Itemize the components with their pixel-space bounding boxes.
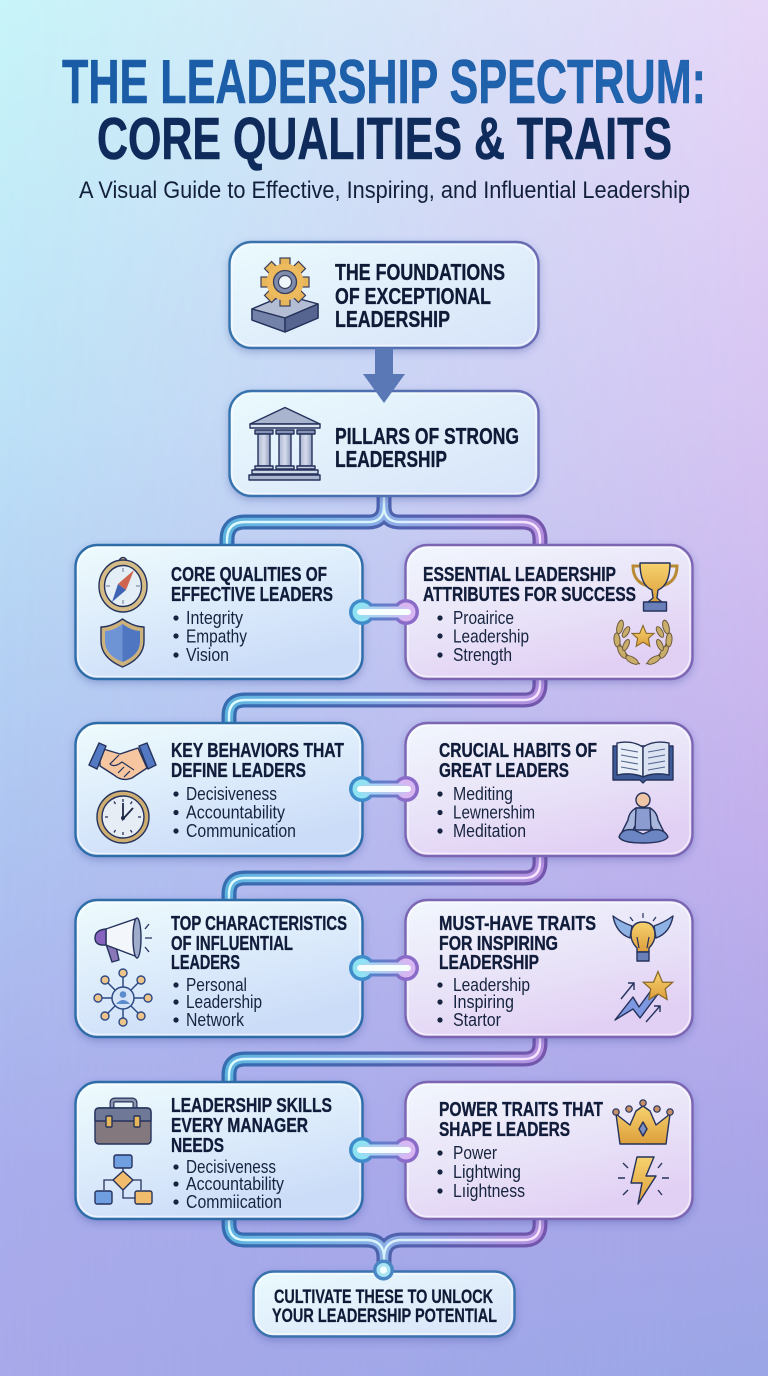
link: row three cards: [349, 955, 419, 981]
connector: pillars fork to first row: [227, 494, 540, 548]
heading: OF EXCEPTIONAL: [335, 283, 491, 309]
icon: lightning bolt: [618, 1157, 669, 1204]
bullet list: [437, 975, 530, 1030]
heading: MUST-HAVE TRAITS: [439, 913, 596, 935]
arrow: foundations to pillars: [363, 348, 405, 403]
heading: NEEDS: [171, 1135, 224, 1157]
bullet list: Lıightness: [453, 1181, 525, 1201]
bullet list: Leadership: [453, 626, 529, 646]
bullet list: Inspiring: [453, 992, 514, 1012]
bullet list: Strength: [453, 645, 512, 665]
heading: [335, 259, 505, 332]
bullet list: Vision: [186, 645, 229, 665]
heading: GREAT LEADERS: [439, 760, 569, 782]
icon: pillars: [249, 408, 320, 480]
heading: [439, 1099, 603, 1141]
bullet list: Commiication: [186, 1192, 282, 1212]
panel: top characteristics: [76, 900, 362, 1037]
bullet list: Empathy: [186, 626, 247, 646]
connector: row two to row three: [229, 853, 540, 903]
connector: row one to row two: [229, 676, 540, 726]
bullet list: Meditation: [453, 821, 526, 841]
bullet list: Proairice: [453, 608, 514, 628]
panel: leadership skills: [76, 1082, 362, 1219]
icon: megaphone: [95, 918, 152, 962]
heading: LEADERSHIP: [335, 446, 447, 472]
icon: gear on stone block: [252, 258, 318, 332]
heading: [171, 740, 344, 782]
heading: CORE QUALITIES OF: [171, 564, 327, 586]
bullet list: [173, 1157, 284, 1212]
heading: [171, 564, 333, 606]
heading: LEADERSHIP SKILLS: [171, 1095, 332, 1117]
closing text: CULTIVATE THESE TO UNLOCK: [274, 1287, 493, 1308]
bullet list: Accountability: [186, 1174, 284, 1194]
connector: row three to row four: [229, 1034, 540, 1085]
panel: essential attributes: [406, 545, 692, 679]
icon: crown: [613, 1100, 673, 1144]
heading: LEADERSHIP: [439, 952, 539, 974]
heading: [171, 1095, 332, 1157]
bullet list: Personal: [186, 975, 247, 995]
icon: compass: [99, 557, 147, 612]
heading: [423, 564, 636, 606]
panel: core qualities: [76, 545, 362, 679]
title: [62, 48, 706, 172]
bullet list: Lightwing: [453, 1162, 521, 1182]
closing text: YOUR LEADERSHIP POTENTIAL: [272, 1306, 497, 1327]
panel: power traits: [406, 1082, 692, 1219]
heading: THE FOUNDATIONS: [335, 259, 505, 285]
icon: people network: [94, 969, 152, 1026]
bullet list: Leadership: [186, 992, 262, 1012]
heading: LEADERS: [171, 952, 240, 974]
heading: EFFECTIVE LEADERS: [171, 584, 333, 606]
heading: LEADERSHIP: [335, 306, 450, 332]
link: row four cards: [349, 1137, 419, 1163]
heading: DEFINE LEADERS: [171, 760, 306, 782]
heading: FOR INSPIRING: [439, 933, 558, 955]
connector end node: [373, 1260, 394, 1280]
heading: [171, 913, 347, 974]
bullet list: [173, 975, 262, 1030]
panel: crucial habits: [406, 723, 692, 856]
bullet list: Communication: [186, 821, 296, 841]
bullet list: Mediting: [453, 784, 513, 804]
heading: TOP CHARACTERISTICS: [171, 913, 347, 935]
heading: ATTRIBUTES FOR SUCCESS: [423, 584, 636, 606]
bullet list: [437, 784, 535, 841]
icon: briefcase: [95, 1100, 151, 1144]
icon: rising star and arrows: [615, 972, 673, 1022]
heading: [439, 740, 597, 782]
bullet list: [437, 1143, 525, 1201]
link: row one cards: [349, 599, 419, 625]
link: row two cards: [349, 776, 419, 802]
bullet list: Decisiveness: [186, 784, 277, 804]
bullet list: [173, 608, 247, 665]
connector: row four merging into closing box: [229, 1216, 540, 1272]
heading: CRUCIAL HABITS OF: [439, 740, 597, 762]
subtitle: A Visual Guide to Effective, Inspiring, and Influential Leadership: [79, 177, 690, 204]
icon: open book: [613, 742, 673, 783]
panel: pillars: [230, 391, 538, 496]
icon: trophy: [633, 563, 677, 611]
heading: OF INFLUENTIAL: [171, 933, 293, 955]
bullet list: Leadership: [453, 975, 530, 995]
heading: ESSENTIAL LEADERSHIP: [423, 564, 616, 586]
heading: PILLARS OF STRONG: [335, 423, 519, 449]
heading: [439, 913, 596, 974]
bullet list: Startor: [453, 1010, 501, 1030]
panel: must-have traits: [406, 900, 692, 1037]
bullet list: Lewnershim: [453, 803, 535, 823]
icon: flowchart: [95, 1155, 152, 1204]
bullet list: Decisiveness: [186, 1157, 276, 1177]
bullet list: [173, 784, 296, 841]
icon: clock: [97, 791, 149, 843]
heading: SHAPE LEADERS: [439, 1119, 570, 1141]
bullet list: Network: [186, 1010, 245, 1030]
heading: KEY BEHAVIORS THAT: [171, 740, 344, 762]
heading: EVERY MANAGER: [171, 1115, 308, 1137]
icon: winged light bulb: [613, 913, 673, 961]
heading: POWER TRAITS THAT: [439, 1099, 603, 1121]
bullet list: Accountability: [186, 803, 285, 823]
bullet list: [437, 608, 529, 665]
panel: key behaviors: [76, 723, 362, 856]
bullet list: Integrity: [186, 608, 243, 628]
heading: [335, 423, 519, 472]
icon: meditating figure: [619, 793, 668, 843]
panel: closing call to action: [254, 1272, 514, 1336]
icon: laurel with star: [613, 619, 673, 666]
panel: foundations: [230, 242, 538, 348]
icon: shield: [101, 619, 144, 667]
closing text: [272, 1287, 497, 1327]
bullet list: Power: [453, 1143, 497, 1163]
icon: handshake: [89, 743, 156, 779]
